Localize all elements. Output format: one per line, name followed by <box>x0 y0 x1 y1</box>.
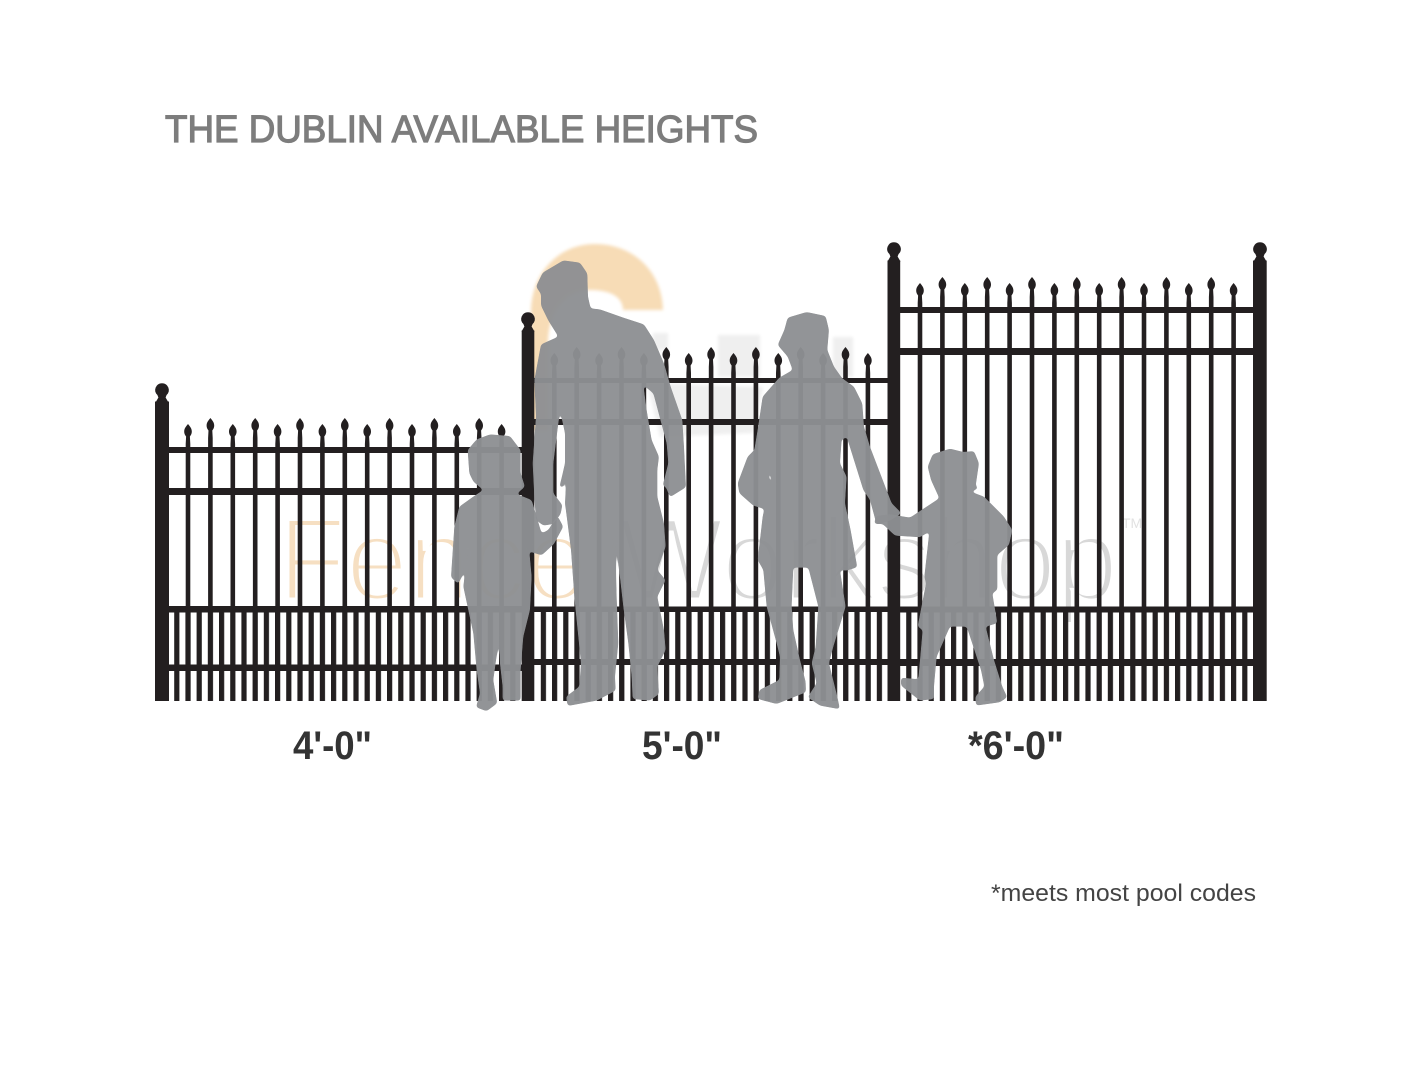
spear pickets <box>184 418 506 701</box>
spear pickets <box>550 347 872 701</box>
watermark: trademark: TM <box>1122 515 1142 531</box>
fence panel: 4'-0" <box>155 383 522 701</box>
short bottom pickets <box>172 612 521 701</box>
watermark: orange C arc <box>531 244 663 430</box>
rails <box>169 447 522 671</box>
spear pickets <box>916 277 1238 701</box>
post left <box>155 383 169 701</box>
watermark: company name: Fence Workshop <box>278 494 1118 626</box>
fence panel: 5'-0" <box>521 312 888 701</box>
height label: 4'-0": 4'-0" <box>293 724 372 768</box>
rails <box>534 378 888 665</box>
watermark: Fence Workshop logo <box>278 244 1142 626</box>
short bottom pickets <box>535 612 887 701</box>
rails <box>900 307 1253 666</box>
post left <box>887 242 901 701</box>
fence panel: 6'-0" <box>887 242 1267 783</box>
footnote: *meets most pool codes <box>991 880 1256 907</box>
silhouette: girl <box>874 449 1012 706</box>
silhouette: man <box>533 260 686 706</box>
height label: *6'-0": *6'-0" <box>968 724 1064 768</box>
height label: 5'-0": 5'-0" <box>642 724 722 768</box>
silhouette: woman <box>738 312 902 709</box>
silhouette: small child <box>451 434 563 711</box>
short bottom pickets <box>901 612 1252 701</box>
title: THE DUBLIN AVAILABLE HEIGHTS <box>165 109 758 151</box>
post left <box>521 312 535 701</box>
post right <box>1253 242 1267 701</box>
watermark: grey roof blocks <box>647 333 853 437</box>
